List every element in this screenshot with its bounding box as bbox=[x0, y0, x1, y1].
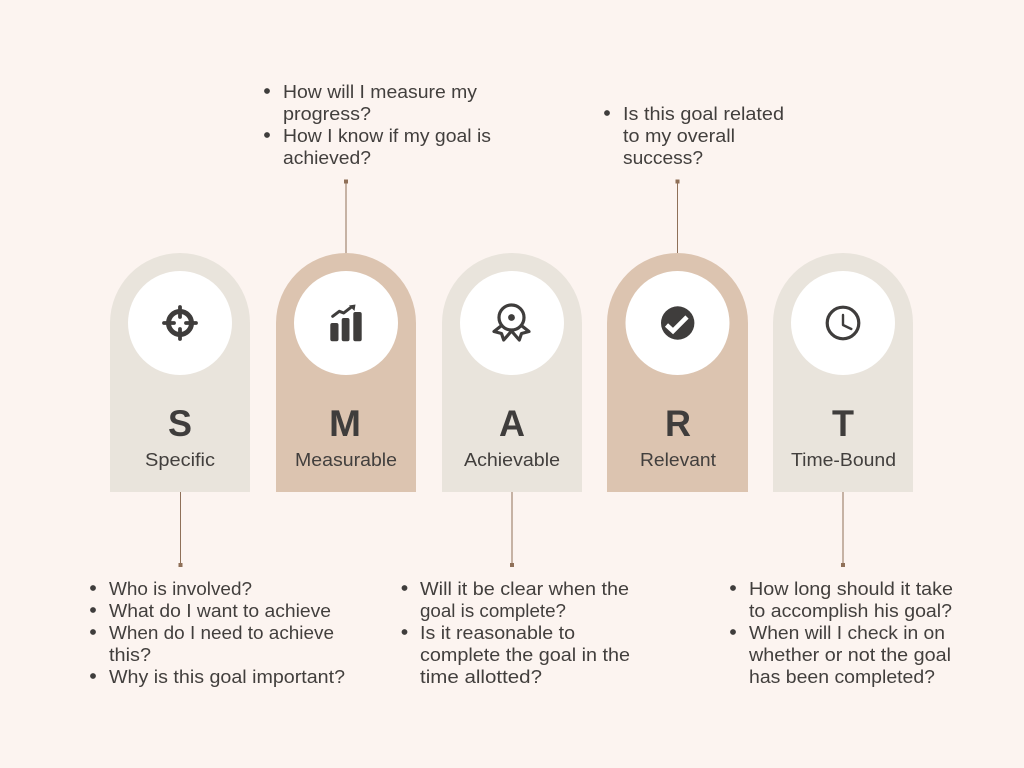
text block: Time-Bound questions: to accomplish his goal? bbox=[749, 600, 952, 621]
panel: Measurable bbox=[276, 253, 416, 492]
text block: Time-Bound questions: How long should it take bbox=[749, 578, 953, 599]
text block: Achievable questions: goal is complete? bbox=[420, 600, 566, 621]
text block: Time-Bound questions: When will I check in on bbox=[749, 622, 945, 643]
text block: Relevant questions bbox=[604, 103, 784, 168]
text block: Specific questions: Why is this goal important? bbox=[109, 666, 345, 687]
letter M: M bbox=[329, 403, 361, 444]
text block: Specific questions: When do I need to achieve bbox=[109, 622, 334, 643]
text block: Specific questions bbox=[90, 578, 345, 687]
label Relevant: Relevant bbox=[640, 450, 716, 470]
connector: Specific bbox=[178, 492, 182, 567]
text block: Relevant questions: Is this goal related bbox=[623, 103, 784, 124]
connector: Time-Bound bbox=[841, 492, 845, 567]
label Specific: Specific bbox=[145, 450, 215, 470]
text block: Specific questions: Who is involved? bbox=[109, 578, 252, 599]
text block: Achievable questions bbox=[402, 578, 630, 687]
text block: Achievable questions: Is it reasonable to bbox=[420, 622, 575, 643]
card shape: Time-Bound bbox=[773, 253, 913, 492]
card shape: Measurable bbox=[276, 253, 416, 492]
label Time-Bound: Time-Bound bbox=[791, 450, 896, 470]
text block: Measurable questions: How will I measure my bbox=[283, 81, 478, 102]
icon circle: Achievable bbox=[460, 271, 564, 375]
text block: Measurable questions: How I know if my goal is bbox=[283, 125, 491, 146]
icon circle: Specific bbox=[128, 271, 232, 375]
icon circle: Measurable bbox=[294, 271, 398, 375]
text block: Measurable questions: achieved? bbox=[283, 147, 371, 168]
text block: Measurable questions bbox=[264, 81, 491, 168]
label Achievable: Achievable bbox=[464, 450, 560, 470]
text block: Relevant questions: to my overall bbox=[623, 125, 735, 146]
text block: Measurable questions: progress? bbox=[283, 103, 371, 124]
text block: Achievable questions: complete the goal in the bbox=[420, 644, 630, 665]
letter A: A bbox=[499, 403, 525, 444]
icon: target bbox=[164, 307, 196, 339]
icon: clock bbox=[827, 307, 859, 339]
connector: Achievable bbox=[510, 492, 514, 567]
text block: Achievable questions: Will it be clear when the bbox=[420, 578, 629, 599]
text block: Relevant questions: success? bbox=[623, 147, 703, 168]
connector: Relevant bbox=[676, 180, 680, 253]
card shape: Achievable bbox=[442, 253, 582, 492]
letter T: T bbox=[832, 403, 854, 444]
text block: Specific questions: this? bbox=[109, 644, 151, 665]
icon: award ribbon bbox=[494, 305, 529, 340]
text block: Achievable questions: time allotted? bbox=[420, 666, 542, 687]
icon: check mark badge bbox=[661, 306, 694, 340]
card shape: Relevant bbox=[607, 253, 748, 492]
icon circle: Time-Bound bbox=[791, 271, 895, 375]
icon: bar chart with arrow bbox=[330, 304, 362, 341]
letter R: R bbox=[665, 403, 691, 444]
text block: Time-Bound questions: has been completed? bbox=[749, 666, 935, 687]
text block: Time-Bound questions: whether or not the goal bbox=[748, 644, 951, 665]
connector: Measurable bbox=[344, 180, 348, 253]
icon circle: Relevant bbox=[626, 271, 730, 375]
text block: Specific questions: What do I want to achieve bbox=[109, 600, 331, 621]
panel: Achievable bbox=[442, 253, 582, 492]
panel: Time-Bound bbox=[773, 253, 913, 492]
panel: Specific bbox=[110, 253, 250, 492]
label Measurable: Measurable bbox=[295, 450, 397, 470]
panel: Relevant bbox=[607, 253, 748, 492]
letter S: S bbox=[168, 403, 192, 444]
card shape: Specific bbox=[110, 253, 250, 492]
text block: Time-Bound questions bbox=[730, 578, 953, 687]
